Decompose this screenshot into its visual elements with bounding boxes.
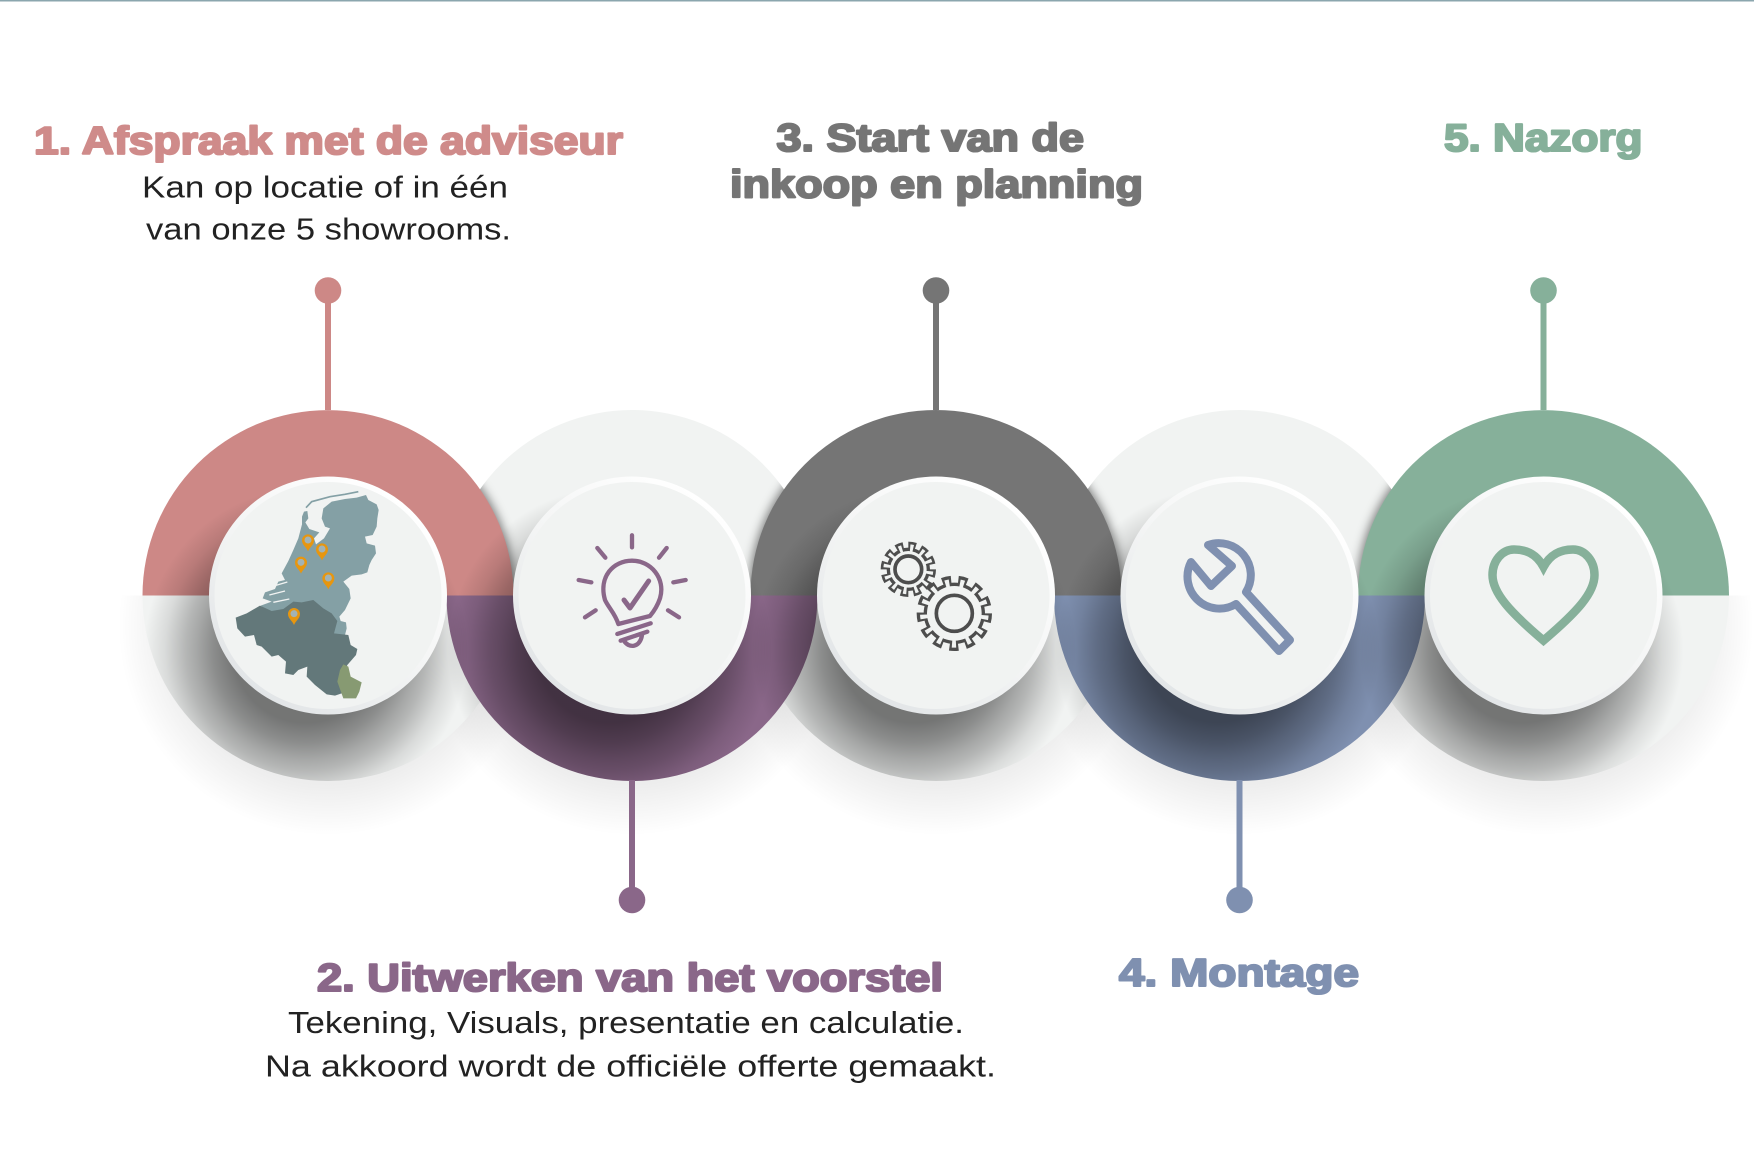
ring top: step 3 [750, 410, 1122, 596]
icon: wrench [1187, 543, 1290, 651]
connector: step 1 pin [315, 277, 341, 410]
rings: light lower halves of steps 1, 3 and 5 [142, 596, 1729, 781]
ring bottom: step 4 [1054, 596, 1425, 781]
disc: step 3 with gears [817, 476, 1055, 714]
ring top: step 1 [142, 410, 514, 596]
body line: step 2 second line: Na akkoord wordt de officiële offerte gemaakt. [265, 1048, 996, 1084]
icon: Benelux map with showroom pins [236, 492, 379, 698]
icon: lightbulb with check mark [579, 535, 686, 646]
rings: coloured upper halves of steps 1, 3 and 5 [142, 410, 1729, 596]
disc: step 5 with heart [1424, 476, 1662, 714]
ring top: step 5 [1358, 410, 1729, 596]
text block: step 3 heading [730, 117, 1143, 207]
connector: step 3 pin [923, 277, 949, 410]
disc: step 4 with wrench [1120, 476, 1358, 714]
disc: step 2 with lightbulb [513, 476, 751, 714]
text block: step 2 [265, 957, 996, 1084]
connector: step 5 pin [1530, 277, 1557, 410]
connector: step 4 pin [1226, 780, 1253, 913]
text block: step 1 [34, 120, 623, 246]
body line: step 1 second line: van onze 5 showrooms. [146, 212, 511, 246]
body line: step 1 first line: Kan op locatie of in één [142, 170, 508, 204]
ring bottom: step 2 [446, 596, 818, 781]
heading: step 3 second line: inkoop en planning [730, 164, 1143, 207]
rings: light upper halves of steps 2 and 4 [446, 410, 1425, 596]
heading: step 5: 5. Nazorg [1444, 117, 1642, 160]
icon: two gears [885, 546, 987, 646]
heading: step 4: 4. Montage [1119, 952, 1359, 995]
heading: step 3 first line: 3. Start van de [776, 117, 1084, 160]
rings: coloured lower halves of steps 2 and 4 [446, 596, 1425, 781]
body line: step 2 first line: Tekening, Visuals, presentatie en calculatie. [288, 1005, 964, 1040]
disc: step 1 with Benelux map [209, 476, 447, 714]
heading: step 2: 2. Uitwerken van het voorstel [317, 957, 943, 1000]
heading: step 1: 1. Afspraak met de adviseur [34, 120, 623, 163]
connector: step 2 pin [619, 780, 645, 913]
icon: heart outline [1492, 550, 1594, 640]
